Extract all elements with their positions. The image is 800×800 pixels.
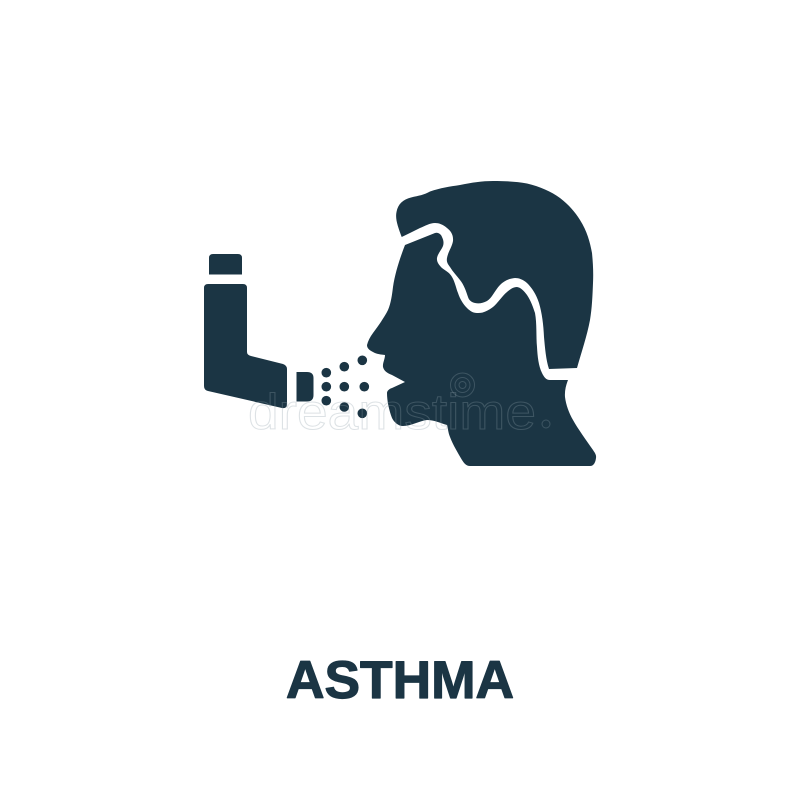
watermark wordmark: dreamstime — [248, 384, 536, 440]
face and neck — [367, 233, 596, 466]
icon: inhaler — [204, 254, 314, 408]
icon: human head in profile — [367, 181, 596, 466]
hair — [396, 181, 593, 369]
title: ASTHMA — [286, 651, 514, 710]
inhaler cap — [209, 254, 242, 274]
inhaler body — [204, 284, 287, 408]
watermark registered mark — [542, 420, 550, 428]
icon: spray particles — [322, 356, 369, 418]
watermark spiral — [450, 373, 474, 397]
inhaler nozzle — [296, 372, 314, 402]
watermark — [248, 373, 550, 440]
